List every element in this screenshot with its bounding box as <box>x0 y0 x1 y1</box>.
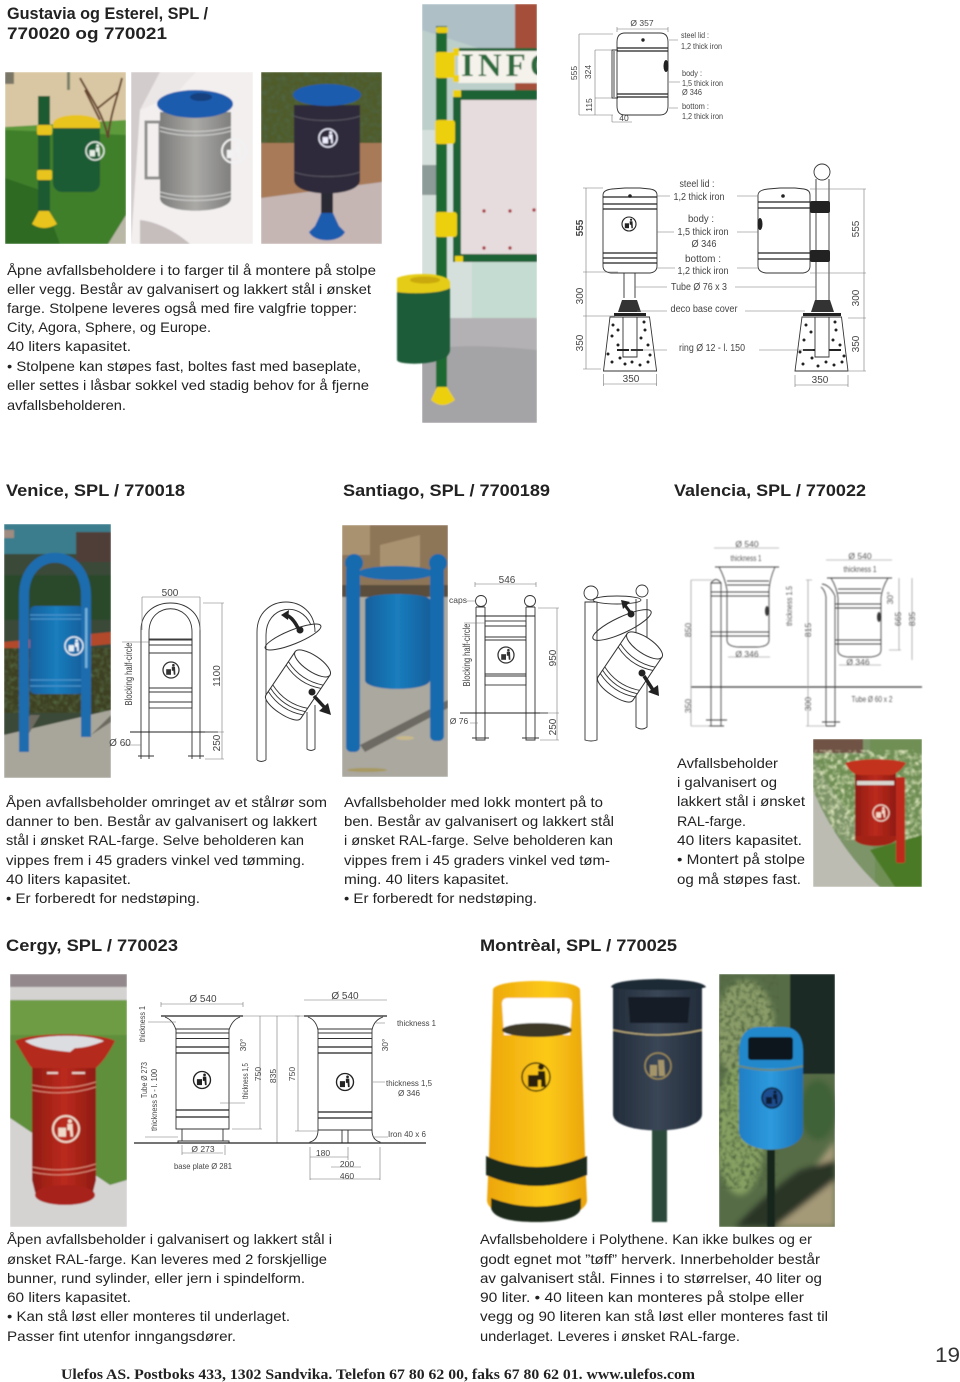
technical drawing: Valencia bins: 835 <box>907 612 917 626</box>
text: Gustavia description: avfallsbeholderen. <box>7 397 126 413</box>
technical drawing: Valencia bins: thickness 1 <box>730 553 762 563</box>
technical drawing: Cergy spindle base: 460 <box>340 1171 354 1181</box>
text: Venice description: • Er forberedt for nedstøping. <box>6 890 200 906</box>
technical drawing: Santiago front view: Ø 76 <box>450 716 468 726</box>
text: Venice description: stål i ønsket RAL-farge. Selve beholderen kan <box>6 832 304 848</box>
text: Cergy description: bunner, rund sylinder, eller jern i spindelform. <box>7 1270 305 1286</box>
photo: Venice blue arch bin <box>4 524 111 778</box>
technical drawing: Cergy spindle base: Ø 540 <box>331 991 359 1002</box>
labels: centre callouts between drawings: deco base cover <box>670 304 738 315</box>
green bin with yellow lid in front of board <box>397 274 450 364</box>
text: Cergy description: • Kan stå løst eller monteres til underlaget. <box>7 1308 290 1324</box>
sign lettering: INFO <box>461 48 560 84</box>
technical drawing: small bin with dimensions <box>569 18 723 123</box>
technical drawing: Valencia bins: thickness 1.5 <box>784 586 794 626</box>
photo: grey bin with blue lid on wall <box>131 72 253 244</box>
text: Montrèal description: vegg og 90 literen kan stå løst eller monteres fast til <box>480 1308 828 1324</box>
text: Santiago description: ming. 40 liters kapasitet. <box>344 871 509 887</box>
technical drawing: Venice front view <box>109 588 224 759</box>
text: Venice description: Åpen avfallsbeholder omringet av et stålrør som <box>6 794 327 810</box>
text: Montrèal description: av galvanisert stål. Finnes i to størrelser, 40 liter og <box>480 1270 822 1286</box>
technical drawing: Valencia bins: 665 <box>893 612 903 626</box>
technical drawing: bin on base, front view <box>575 188 675 386</box>
labels: centre callouts between drawings: bottom : <box>685 254 721 265</box>
photo: info board with green pole <box>422 4 537 423</box>
technical drawing: bin on base, front view: 555 <box>575 219 586 236</box>
technical drawing: bin on ball-top pole, side view <box>735 164 866 387</box>
technical drawing: bin on ball-top pole, side view: 555 <box>851 220 862 237</box>
text: Cergy description: 60 liters kapasitet. <box>7 1289 131 1305</box>
technical drawing: Cergy cylinder base <box>137 994 300 1171</box>
text: Gustavia description <box>7 262 376 413</box>
text: Cergy description: ønsket RAL-farge. Kan leveres med 2 forskjellige <box>7 1251 327 1267</box>
heading: Gustavia og Esterel: 770020 og 770021 <box>7 25 167 43</box>
text: Venice description: 40 liters kapasitet. <box>6 871 131 887</box>
technical drawing: small bin with dimensions: 1,2 thick iron <box>681 41 722 51</box>
technical drawing: Cergy spindle base: 200 <box>340 1159 354 1169</box>
technical drawing: Venice tilted bin with arrows <box>257 602 334 762</box>
technical drawing: small bin with dimensions: body : <box>682 68 702 78</box>
heading: Gustavia og Esterel: Gustavia og Esterel, SPL / <box>7 5 208 23</box>
technical drawing: Santiago front view <box>449 575 559 740</box>
text: Cergy description: Åpen avfallsbeholder i galvanisert og lakkert stål i <box>7 1231 332 1247</box>
text: Gustavia description: Åpne avfallsbeholdere i to farger til å montere på stolpe <box>7 262 376 278</box>
text: Valencia description <box>677 755 805 887</box>
technical drawing: small bin with dimensions: Ø 346 <box>682 87 702 97</box>
text: Gustavia description: eller vegg. Består av galvanisert og lakkert stål i ønsket <box>7 281 371 297</box>
technical drawing: Valencia bins: Tube Ø 60 x 2 <box>852 694 893 704</box>
labels: centre callouts between drawings: 1,2 thick iron <box>674 192 724 203</box>
technical drawing: Santiago front view: 950 <box>548 649 559 666</box>
technical drawing: Valencia bins: 815 <box>803 623 813 637</box>
technical drawing: bin on base, front view: 300 <box>575 287 586 304</box>
technical drawing: Cergy cylinder base: 30° <box>238 1039 248 1051</box>
technical drawing: Cergy cylinder base: 750 <box>253 1067 263 1081</box>
technical drawing: Cergy cylinder base: thickness 5 - l. 100 <box>149 1069 159 1131</box>
heading: Montrèal: Montrèal, SPL / 770025 <box>480 937 677 955</box>
text: Santiago description: Avfallsbeholder med lokk montert på to <box>344 794 603 810</box>
text: Gustavia description: eller settes i låsbar sokkel ved stadig behov for å fjerne <box>7 377 369 393</box>
technical drawing: Santiago tilted bin with arrows <box>584 585 666 741</box>
text: Montrèal description <box>480 1231 828 1344</box>
labels: centre callouts between drawings: steel lid : <box>680 179 714 190</box>
technical drawing: Cergy spindle base: Ø 346 <box>398 1088 420 1098</box>
heading: Santiago: Santiago, SPL / 7700189 <box>343 482 550 500</box>
text: Santiago description: vippes frem i 45 graders vinkel ved tøm- <box>344 852 610 868</box>
technical drawing: Cergy spindle base: thickness 1 <box>397 1018 436 1028</box>
labels: centre callouts between drawings: Tube Ø 76 x 3 <box>671 282 727 293</box>
text: Venice description <box>6 794 327 906</box>
technical drawing: bin on ball-top pole, side view: 300 <box>851 289 862 306</box>
technical drawing: Venice front view: 250 <box>212 734 223 751</box>
technical drawing: bin on ball-top pole, side view: 350 <box>851 335 862 352</box>
technical drawing: Cergy spindle base: thickness 1,5 <box>386 1078 432 1088</box>
technical drawing: Cergy cylinder base: Ø 540 <box>189 994 217 1005</box>
page number: 19 <box>935 1344 960 1367</box>
technical drawing: small bin with dimensions: 115 <box>584 98 594 112</box>
text: Valencia description: Avfallsbeholder <box>677 755 778 771</box>
text: Santiago description <box>344 794 614 906</box>
labels: centre callouts between drawings <box>670 179 745 354</box>
text: Valencia description: og må støpes fast. <box>677 871 801 887</box>
text: Valencia description: RAL-farge. <box>677 813 746 829</box>
technical drawing: Cergy spindle base: 750 <box>287 1067 297 1081</box>
technical drawing: Valencia bins: Ø 540 <box>848 551 872 561</box>
text: Montrèal description: Avfallsbeholdere i Polythene. Kan ikke bulkes og er <box>480 1231 812 1247</box>
technical drawing: Valencia bins: Ø 346 <box>846 657 870 667</box>
labels: centre callouts between drawings: ring Ø 12 - l. 150 <box>679 343 745 354</box>
labels: centre callouts between drawings: body : <box>688 214 714 225</box>
text: Valencia description: 40 liters kapasitet. <box>677 832 802 848</box>
technical drawing: bin on base, front view: 350 <box>575 334 586 351</box>
heading: Venice: Venice, SPL / 770018 <box>6 482 185 500</box>
technical drawing: Valencia bins: 350 <box>683 699 693 713</box>
technical drawing: small bin with dimensions: 324 <box>583 65 593 79</box>
technical drawing: small bin with dimensions: bottom : <box>682 101 709 111</box>
text: Valencia description: lakkert stål i ønsket <box>677 793 805 809</box>
technical drawing: Cergy cylinder base: Ø 273 <box>191 1144 215 1154</box>
technical drawing: Valencia bins: 300 <box>803 697 813 711</box>
text: Montrèal description: godt egnet mot ”tøff” herverk. Innerbeholder består <box>480 1251 820 1267</box>
photo: Cergy red bin <box>10 974 127 1227</box>
technical drawing: small bin with dimensions: Ø 357 <box>630 18 654 28</box>
text: Santiago description: • Er forberedt for nedstøping. <box>344 890 537 906</box>
photo: Santiago blue bin between posts <box>342 525 448 777</box>
text: Gustavia description: farge. Stolpene leveres også med fire valgfrie topper: <box>7 300 357 316</box>
text: Gustavia description: • Stolpene kan støpes fast, boltes fast med baseplate, <box>7 358 361 374</box>
technical drawing: Cergy cylinder base: Tube Ø 273 <box>139 1062 149 1098</box>
technical drawing: Cergy cylinder base: base plate Ø 281 <box>174 1161 232 1171</box>
technical drawing: Cergy spindle base: Iron 40 x 6 <box>388 1129 426 1139</box>
technical drawing: Venice front view: 1100 <box>212 665 223 687</box>
technical drawing: Cergy cylinder base: 835 <box>268 1069 278 1083</box>
technical drawing: Valencia bins <box>683 539 922 726</box>
technical drawing: small bin with dimensions: 1,5 thick iron <box>682 78 723 88</box>
photo: dark bin with blue lid on base <box>261 72 382 244</box>
technical drawing: Valencia bins: 30° <box>885 592 895 604</box>
text: Valencia description: • Montert på stolpe <box>677 851 805 867</box>
technical drawing: Cergy spindle base: 180 <box>316 1148 330 1158</box>
text: Cergy description <box>7 1231 332 1344</box>
technical drawing: Valencia bins: Ø 346 <box>735 649 759 659</box>
heading: Cergy: Cergy, SPL / 770023 <box>6 937 178 955</box>
labels: centre callouts between drawings: Ø 346 <box>692 239 717 250</box>
photo: Montrèal yellow bin <box>486 981 587 1222</box>
labels: centre callouts between drawings: 1,5 thick iron <box>678 227 728 238</box>
text: Gustavia description: City, Agora, Sphere, og Europe. <box>7 319 211 335</box>
technical drawing: small bin with dimensions: 555 <box>569 66 579 80</box>
technical drawing: small bin with dimensions: 1,2 thick iron <box>682 111 723 121</box>
text: Gustavia description: 40 liters kapasitet. <box>7 338 131 354</box>
text: Santiago description: ben. Består av galvanisert og lakkert stål <box>344 813 614 829</box>
heading: Gustavia og Esterel <box>7 5 208 43</box>
technical drawing: Cergy spindle base: 30° <box>380 1039 390 1051</box>
technical drawing: Cergy spindle base <box>134 991 436 1181</box>
technical drawing: Valencia bins: thickness 1 <box>844 564 877 574</box>
photo: Montrèal dark bin on pole <box>611 979 706 1222</box>
technical drawing: Venice front view: Blocking half-circle <box>124 642 135 706</box>
text: Montrèal description: underlaget. Leveres i ønsket RAL-farge. <box>480 1328 740 1344</box>
technical drawing: Venice front view: Ø 60 <box>109 738 131 749</box>
technical drawing: bin on base, front view: 350 <box>623 374 640 385</box>
labels: centre callouts between drawings: 1,2 thick iron <box>678 266 728 277</box>
text: Venice description: vippes frem i 45 graders vinkel ved tømming. <box>6 852 305 868</box>
photo: Montrèal blue bin in garden <box>715 974 836 1227</box>
text: Valencia description: i galvanisert og <box>677 774 777 790</box>
technical drawing: Valencia bins: Ø 540 <box>735 539 759 549</box>
technical drawing: small bin with dimensions: 40 <box>619 113 629 123</box>
technical drawing: Santiago front view: 546 <box>499 575 516 586</box>
photo: Valencia red bin <box>813 739 922 887</box>
technical drawing: Cergy cylinder base: thickness 1 <box>137 1006 147 1042</box>
technical drawing: Cergy cylinder base: thickness 1,5 <box>240 1063 250 1099</box>
technical drawing: bin on ball-top pole, side view: 350 <box>812 375 829 386</box>
heading: Valencia: Valencia, SPL / 770022 <box>674 482 866 500</box>
technical drawing: Santiago front view: Blocking half-circle <box>462 623 473 686</box>
technical drawing: Valencia bins: 850 <box>683 623 693 637</box>
technical drawing: Santiago front view: 250 <box>548 718 559 735</box>
text: Montrèal description: 90 liter. • 40 liteen kan monteres på stolpe eller <box>480 1289 804 1305</box>
technical drawing: Santiago front view: caps <box>449 595 467 605</box>
text: Santiago description: i ønsket RAL-farge. Selve beholderen kan <box>344 832 613 848</box>
technical drawing: Venice front view: 500 <box>162 588 179 599</box>
text: Cergy description: Passer fint utenfor inngangsdører. <box>7 1328 236 1344</box>
technical drawing: small bin with dimensions: steel lid : <box>681 30 709 40</box>
text: Venice description: danner to ben. Består av galvanisert og lakkert <box>6 813 317 829</box>
photo: green bin on pole with yellow lid <box>5 72 126 244</box>
